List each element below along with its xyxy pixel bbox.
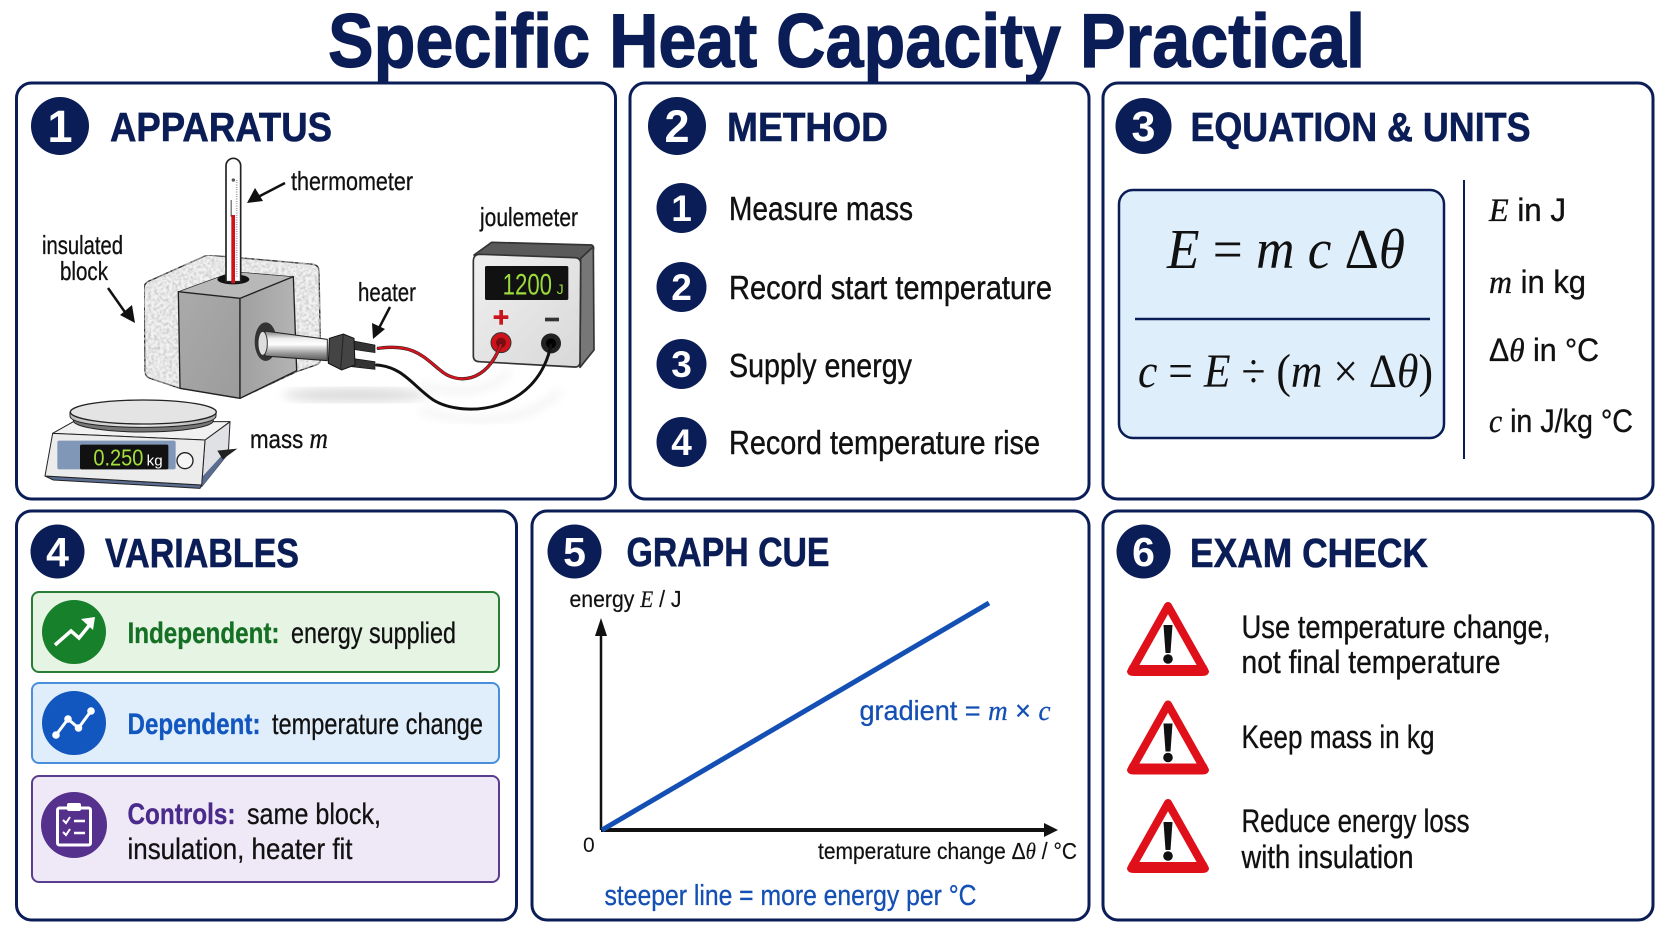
balance reading: kg: [147, 453, 163, 469]
graph note: steeper line = more energy per °C: [604, 880, 976, 912]
label: joulemeter: joulemeter: [479, 202, 578, 232]
equation heading: EQUATION & UNITS: [1190, 104, 1530, 150]
panel: equation and units: [1103, 83, 1653, 499]
panel: method: [630, 83, 1089, 499]
step 2: [656, 262, 1052, 312]
label: thermometer with arrow: thermometer: [291, 166, 413, 196]
row: controls: same block,: [247, 798, 381, 831]
icon: blue data line: [42, 691, 106, 755]
icon: green trend arrow: [42, 600, 106, 664]
apparatus heading: APPARATUS: [110, 104, 332, 150]
icon: warning triangle: [1127, 704, 1209, 774]
icon: purple clipboard: [41, 792, 107, 858]
row: independent: energy supplied: [291, 617, 456, 650]
label: insulated block with arrow: [42, 230, 135, 323]
equation number badge: 3: [1132, 103, 1155, 151]
apparatus number badge: 1: [47, 101, 73, 152]
label: insulated block with arrow: block: [60, 256, 109, 286]
graph heading: GRAPH CUE: [626, 529, 830, 575]
row: controls: [32, 776, 499, 882]
method heading: METHOD: [727, 104, 888, 150]
row: independent: [32, 592, 499, 672]
label: mass m: mass m: [250, 422, 328, 455]
step 2: 2: [671, 267, 692, 308]
row: dependent: temperature change: [272, 708, 483, 741]
warning 1: not final temperature: [1242, 644, 1500, 680]
panel: exam check: [1103, 511, 1653, 920]
method number badge: [648, 97, 706, 155]
units list: m in kg: [1489, 264, 1586, 301]
panel: graph cue: [532, 511, 1089, 920]
units list: E in J: [1488, 192, 1566, 229]
balance reading: 0.250: [93, 445, 143, 471]
step 4: [656, 417, 1040, 467]
warning 3: with insulation: [1241, 839, 1414, 875]
equation box: [1119, 190, 1444, 438]
label: heater with arrow: [358, 277, 416, 339]
icon: wires and joulemeter: [377, 242, 594, 409]
icon: thermometer: [226, 158, 241, 283]
step 1: 1: [671, 188, 692, 229]
plus and minus signs: [494, 310, 559, 325]
label: thermometer with arrow: [247, 166, 413, 203]
row: controls: Controls:: [128, 798, 236, 831]
row: independent: Independent:: [128, 617, 280, 650]
icon: warning triangle: [1127, 606, 1209, 676]
step 1: Measure mass: [729, 190, 913, 227]
wire shadows: [420, 370, 560, 420]
exam number badge: 6: [1132, 529, 1155, 575]
step 3: Supply energy: [729, 347, 912, 384]
equation number badge: [1116, 98, 1172, 154]
variables number badge: [30, 524, 84, 578]
method number badge: 2: [664, 101, 690, 152]
row: dependent: [32, 683, 499, 763]
joulemeter reading: J: [557, 281, 564, 297]
units list: Δθ in °C: [1489, 332, 1599, 369]
step 2: Record start temperature: [729, 269, 1052, 306]
row: controls: insulation, heater fit: [128, 833, 353, 866]
variables number badge: 4: [46, 529, 69, 575]
step 3: [656, 339, 912, 389]
title: Specific Heat Capacity Practical: [328, 0, 1365, 84]
graph number badge: [548, 524, 602, 578]
label: heater with arrow: heater: [358, 277, 416, 307]
step 3: 3: [671, 344, 692, 385]
units list: c in J/kg °C: [1489, 403, 1633, 440]
y axis label: energy E / J: [570, 586, 682, 612]
warning 2: Keep mass in kg: [1242, 719, 1434, 755]
axes: [595, 618, 1058, 837]
icon: warning triangle: [1127, 803, 1209, 873]
warning 1: [1127, 606, 1550, 680]
row: dependent: Dependent:: [128, 708, 260, 741]
warning 2: [1127, 704, 1434, 774]
energy line: [602, 603, 989, 830]
step 4: 4: [671, 422, 692, 463]
equation: specific heat capacity: c = E ÷ (m × Δθ): [1138, 345, 1433, 398]
origin: 0: [583, 834, 595, 857]
line graph: [570, 586, 1077, 864]
units list: [1488, 192, 1633, 440]
panel: variables: [16, 511, 516, 920]
exam number badge: [1116, 524, 1170, 578]
equation: energy: E = m c Δθ: [1166, 219, 1405, 281]
warning 3: [1127, 803, 1470, 875]
panel: apparatus: [16, 83, 616, 499]
x axis label: temperature change Δθ / °C: [818, 838, 1077, 864]
icon: balance: [45, 400, 237, 488]
warning 1: Use temperature change,: [1242, 609, 1550, 645]
red and black terminals: [491, 333, 561, 353]
step 1: [656, 183, 913, 233]
step 4: Record temperature rise: [729, 424, 1040, 461]
gradient label: gradient = m × c: [860, 695, 1051, 727]
block shadow: [283, 388, 427, 402]
label: insulated block with arrow: insulated: [42, 230, 123, 260]
apparatus number badge: [31, 97, 89, 155]
icon: insulated block with thermometer and heater: [144, 158, 375, 398]
graph number badge: 5: [563, 529, 586, 575]
icon: heater probe: [258, 331, 375, 370]
warning 3: Reduce energy loss: [1242, 803, 1470, 839]
joulemeter reading: 1200: [503, 269, 552, 302]
variables heading: VARIABLES: [105, 530, 299, 576]
heater leads: [377, 345, 551, 409]
exam heading: EXAM CHECK: [1190, 530, 1428, 576]
